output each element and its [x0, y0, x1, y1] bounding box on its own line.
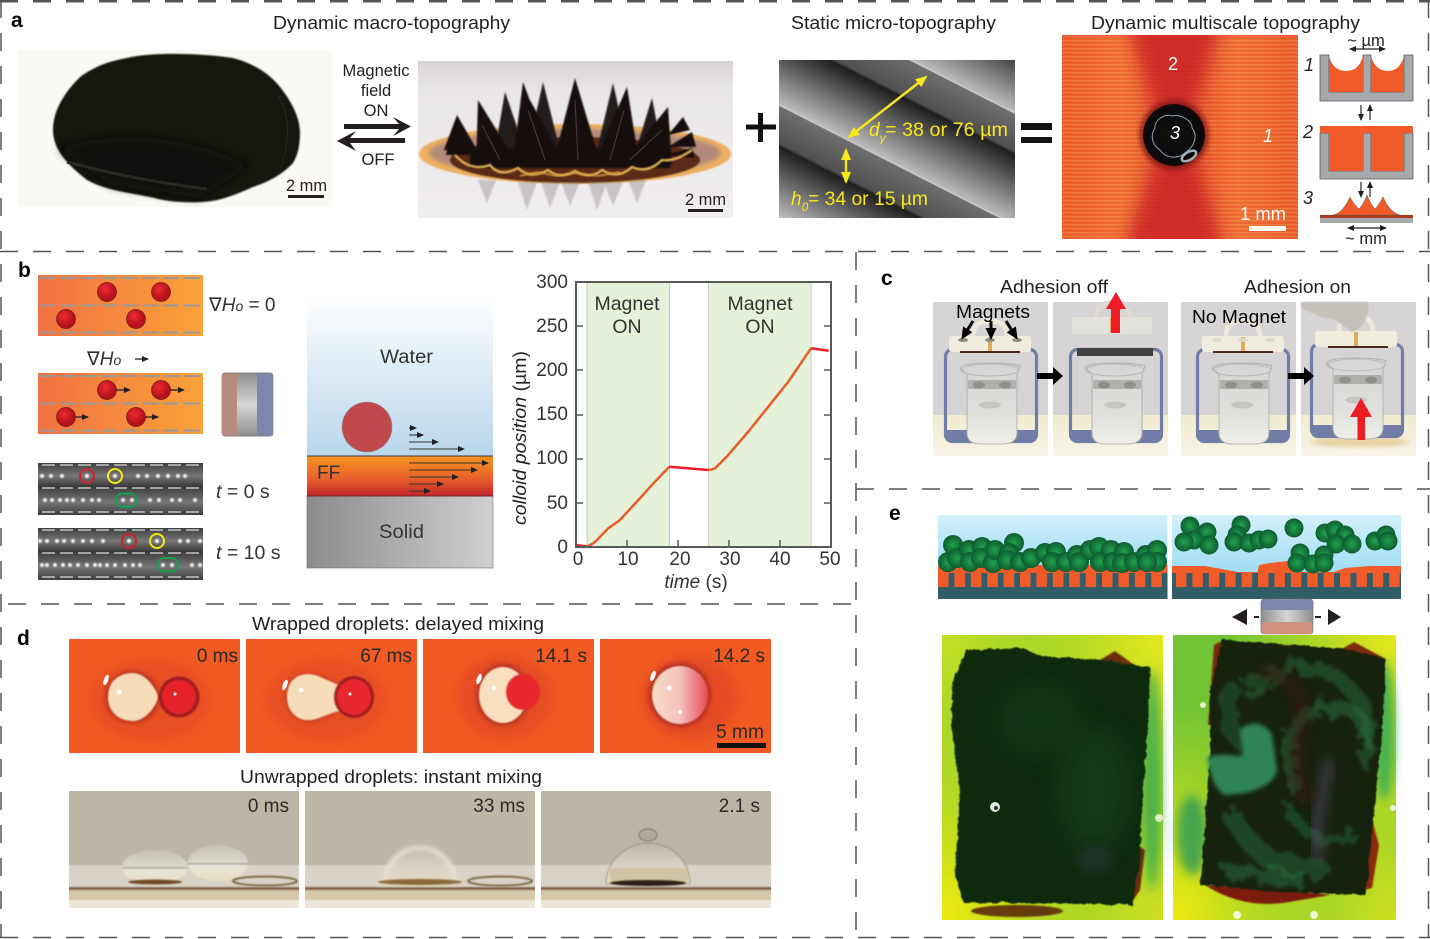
label: magnetic field on/off: Magnetic	[343, 62, 409, 80]
state 3 schematic	[1320, 195, 1413, 223]
photo: unwrapped 2.1 s	[536, 791, 776, 912]
arrow: reversible	[337, 117, 411, 151]
arrows and scale labels: 3	[1303, 188, 1313, 208]
photo: wrapped 14.2 s	[600, 639, 771, 753]
image: multiscale topography: 1 mm	[1240, 204, 1286, 224]
photo: unwrapped 0 ms	[64, 791, 304, 912]
label: zero gradient: ∇Ho = 0	[208, 295, 275, 316]
photo: all lifted	[1301, 302, 1416, 456]
chart: colloid position vs time: Magnet	[594, 293, 660, 315]
panel: d	[17, 614, 776, 912]
photo: wrapped 14.1 s: 14.1 s	[535, 646, 587, 667]
photo: wrapped 67 ms: 67 ms	[360, 646, 412, 667]
arrow: black right	[1037, 367, 1063, 385]
chart: colloid position vs time: colloid position (µm)	[510, 351, 530, 525]
schematic: water FF solid	[307, 295, 493, 568]
image: micro-topography SEM: = 38 or 76 µm	[885, 120, 1008, 141]
heading: dynamic macro-topography: Dynamic macro-topography	[273, 13, 510, 33]
image: micro-topography SEM: d	[869, 120, 880, 141]
schematic: particles removed by magnet	[1172, 515, 1401, 599]
icon: magnet with arrows	[1232, 599, 1341, 634]
photo: lid lifted	[1053, 302, 1168, 456]
chart: colloid position vs time: 40	[769, 549, 791, 570]
panel label c: c	[881, 267, 893, 290]
chart: colloid position vs time: ON	[612, 316, 642, 338]
chart: colloid position vs time: 20	[669, 549, 691, 570]
heading: adhesion off: Adhesion off	[1000, 277, 1109, 297]
chart: colloid position vs time: 10	[617, 549, 639, 570]
chart: colloid position vs time	[510, 272, 841, 593]
chart: colloid position vs time: 100	[536, 448, 568, 469]
photo: intact biofilm sheet	[942, 635, 1163, 920]
arrows and scale labels	[1302, 32, 1387, 248]
chart: colloid position vs time: 200	[536, 360, 568, 381]
chart: colloid position vs time: Magnet	[727, 293, 793, 315]
image: micro-topography SEM: h	[791, 189, 802, 210]
image: multiscale topography: 1	[1263, 126, 1273, 146]
chart: colloid position vs time: ON	[745, 316, 775, 338]
chart: colloid position vs time: 30	[719, 549, 741, 570]
arrow: black right	[1288, 367, 1314, 385]
photo: disrupted biofilm sheet	[1173, 635, 1396, 920]
schematic: states 1 2 3	[1302, 32, 1413, 248]
arrow: red up	[1106, 292, 1126, 333]
photo: unwrapped 33 ms	[300, 791, 540, 912]
panel: b	[18, 259, 841, 593]
label: gradient with arrow	[86, 349, 148, 370]
panel: a	[11, 9, 1413, 255]
panel label a: a	[11, 9, 23, 32]
schematic: water FF solid: Water	[380, 347, 434, 368]
photo: unwrapped 2.1 s: 2.1 s	[719, 796, 760, 817]
image: colloids t=0	[38, 463, 203, 515]
panel label e: e	[889, 502, 901, 525]
heading: unwrapped droplets: Unwrapped droplets: instant mixing	[240, 767, 542, 787]
photo: wrapped 0 ms: 0 ms	[197, 646, 238, 667]
heading: static micro-topography: Static micro-topography	[791, 13, 996, 33]
image: multiscale topography: 3	[1170, 123, 1180, 143]
photo: wrapped 14.2 s: 5 mm	[716, 722, 764, 743]
heading: wrapped droplets: Wrapped droplets: delayed mixing	[252, 614, 544, 634]
panel label d: d	[17, 627, 30, 650]
arrows and scale labels: 2	[1302, 122, 1313, 142]
schematic: colloids moving	[38, 373, 203, 434]
photo: no magnet lid	[1181, 302, 1296, 456]
chart: colloid position vs time: 250	[536, 316, 568, 337]
photo: wrapped 14.1 s	[423, 639, 594, 753]
chart: colloid position vs time: 0	[573, 549, 583, 570]
image: colloids t=10	[38, 528, 203, 580]
label: t = 10 s: t = 10 s	[216, 542, 281, 564]
scale bar: 2 mm: 2 mm	[685, 191, 726, 209]
label: gradient with arrow: ∇Ho	[86, 349, 121, 370]
photo: unwrapped 33 ms: 33 ms	[473, 796, 525, 817]
panel: e	[889, 502, 1401, 920]
heading: adhesion on: Adhesion on	[1244, 277, 1351, 297]
schematic: particles on surface	[938, 515, 1168, 599]
image: multiscale topography: 2	[1168, 54, 1178, 74]
photo: no magnet lid: No Magnet	[1192, 307, 1286, 327]
label: magnetic field on/off: field	[361, 82, 391, 100]
curve	[576, 348, 829, 546]
label: magnetic field on/off	[343, 62, 409, 169]
chart: colloid position vs time: 300	[536, 272, 568, 293]
arrow: red up	[1350, 398, 1372, 440]
panel label b: b	[18, 259, 31, 282]
icon: equals	[1021, 123, 1052, 143]
image: micro-topography SEM: 0	[802, 200, 809, 214]
state 1 schematic	[1320, 55, 1413, 101]
label: t = 0 s: t = 0 s	[216, 481, 270, 503]
icon: plus	[746, 113, 776, 142]
arrows and scale labels: 1	[1304, 55, 1314, 75]
photo: unwrapped 0 ms: 0 ms	[248, 796, 289, 817]
heading: dynamic multiscale topography: Dynamic multiscale topography	[1091, 13, 1360, 33]
image: multiscale topography	[1052, 15, 1308, 255]
photo: lid with magnets	[933, 302, 1048, 456]
icon: magnet	[222, 373, 273, 436]
arrows and scale labels: ~ mm	[1345, 230, 1387, 248]
label: magnetic field on/off: OFF	[362, 151, 394, 169]
image: micro-topography SEM	[779, 60, 1015, 218]
chart: colloid position vs time: 0	[557, 537, 568, 558]
photo: wrapped 0 ms	[69, 639, 240, 753]
chart: colloid position vs time: time (s)	[664, 572, 728, 593]
arrows and scale labels: ~ µm	[1347, 32, 1385, 50]
photo: wrapped 14.2 s: 14.2 s	[713, 646, 765, 667]
state 2 schematic	[1320, 126, 1413, 179]
image: micro-topography SEM: y	[879, 131, 887, 145]
photo: wrapped 67 ms	[246, 639, 417, 753]
chart: colloid position vs time: 50	[547, 493, 568, 514]
label: magnetic field on/off: ON	[364, 102, 388, 120]
photo: ferrofluid spikes	[418, 61, 733, 218]
panel: c	[881, 267, 1416, 456]
schematic: water FF solid: FF	[317, 463, 340, 484]
photo: lid with magnets: Magnets	[956, 302, 1030, 322]
photo: flat black droplet	[17, 50, 332, 207]
schematic: colloids no gradient	[38, 275, 203, 336]
image: micro-topography SEM: = 34 or 15 µm	[808, 189, 928, 210]
scale bar: 2 mm: 2 mm	[286, 177, 327, 195]
schematic: water FF solid: Solid	[379, 522, 424, 543]
chart: colloid position vs time: 50	[819, 549, 841, 570]
chart: colloid position vs time: 150	[536, 404, 568, 425]
